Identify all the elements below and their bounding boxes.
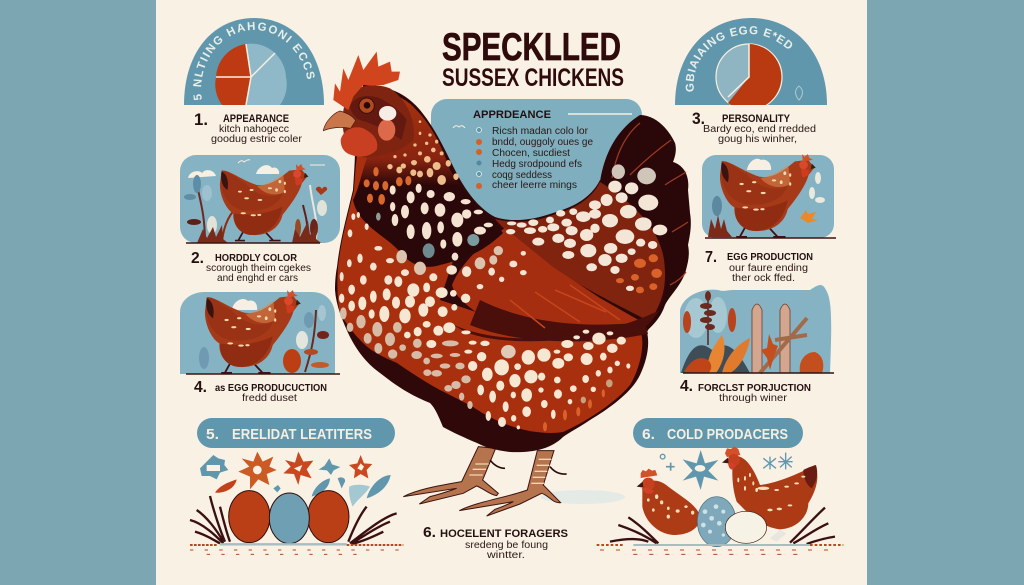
panel: hen scene 2: [180, 155, 340, 243]
hens and eggs right: [597, 446, 843, 554]
panel: centre appearance list: Ricsh madan colo lor: [492, 126, 589, 137]
beak: [323, 111, 356, 131]
text: 4 as egg production: as EGG PRODUCUCTION: [215, 382, 327, 394]
saddle: [495, 182, 665, 322]
text: 6 hocelent foragers: [423, 524, 568, 561]
text: 4 as egg production: 4.: [194, 379, 207, 396]
panel: centre appearance list: bndd, ouggoly oues ge: [492, 137, 593, 148]
text: 2 hordly color: 2.: [191, 250, 204, 267]
text: 7 egg production: our faure ending: [729, 263, 808, 274]
text: 6 hocelent foragers: 6.: [423, 524, 436, 541]
panel: centre appearance list: coqg seddess: [492, 170, 552, 181]
foot shadow: [541, 490, 625, 504]
head: [323, 52, 414, 158]
text: 4 forclst poruction: 4.: [680, 378, 693, 395]
title: SUSSEX CHICKENS: [442, 64, 624, 92]
wattle: [341, 127, 377, 157]
text: 6 hocelent foragers: sredeng be foung: [465, 540, 548, 551]
pill heading 5: [197, 418, 395, 448]
text: 4 forclst poruction: FORCLST PORJUCTION: [698, 382, 811, 394]
comb: [333, 52, 400, 110]
text: 3 personality: Bardy eco, end rredded: [703, 124, 816, 135]
hackle cape: [353, 105, 503, 267]
main chicken: [323, 52, 691, 516]
body: [335, 85, 666, 452]
text: 6 hocelent foragers: HOCELENT FORAGERS: [440, 528, 568, 540]
text: 7 egg production: [705, 249, 813, 284]
pill heading 5: ERELIDAT LEATITERS: [232, 426, 372, 443]
panel: centre appearance list: cheer leerre mings: [492, 180, 577, 191]
pill heading 5: 5.: [206, 426, 219, 443]
text: 7 egg production: ther ock ffed.: [732, 273, 795, 284]
text: 4 as egg production: [194, 379, 327, 404]
text: 1 appearance: goodug estric coler: [211, 134, 303, 145]
red plumage: [337, 90, 642, 433]
panel: gauge left: 5 NLTIING HAHGONI ECCS: [193, 22, 315, 100]
text: 6 hocelent foragers: wintter.: [486, 550, 525, 561]
panel: centre appearance list: Chocen, sucdiest: [492, 148, 570, 159]
panel: centre appearance list: APPRDEANCE: [473, 109, 551, 121]
pill heading 6: 6.: [642, 426, 655, 443]
text: 2 hordly color: HORDDLY COLOR: [215, 252, 297, 264]
text: 1 appearance: APPEARANCE: [223, 113, 289, 125]
panel: hen scene 4: [180, 290, 340, 374]
wing: [452, 228, 642, 332]
text: 2 hordly color: and enghd er cars: [217, 273, 298, 284]
feather spots: saddle: [506, 164, 667, 293]
pill heading 6: COLD PRODACERS: [667, 426, 788, 443]
text: 1 appearance: 1.: [194, 110, 208, 129]
text: 3 personality: [692, 109, 816, 145]
text: 1 appearance: [194, 110, 303, 145]
text: 3 personality: PERSONALITY: [722, 113, 791, 125]
panel: centre appearance list: [431, 99, 642, 224]
title: [442, 26, 624, 92]
text: 3 personality: 3.: [692, 109, 705, 128]
text: 2 hordly color: [191, 250, 311, 284]
text: 1 appearance: kitch nahogecc: [219, 124, 289, 135]
text: 4 forclst poruction: through winer: [719, 393, 788, 404]
text: 7 egg production: EGG PRODUCTION: [727, 251, 813, 263]
panel: hen scene 7: [702, 154, 836, 238]
pill heading 6: [633, 418, 803, 448]
wing under band: [448, 300, 660, 341]
text: 4 as egg production: fredd duset: [242, 393, 297, 404]
cream centre sheet: [156, 0, 867, 585]
eye: [359, 98, 374, 113]
feather spots: neck, cape and chest: [340, 120, 527, 295]
panel: forage scene: [680, 285, 834, 373]
text: 7 egg production: 7.: [705, 249, 717, 266]
text: 2 hordly color: scorough theim cgekes: [206, 263, 311, 274]
legs and feet: [403, 447, 567, 516]
panel: centre appearance list: Hedg srodpound efs: [492, 159, 582, 170]
ear: [378, 119, 395, 141]
icons and eggs left: [190, 452, 403, 554]
panel: gauge right: GBIAIAING EGG E*ED: [686, 26, 792, 92]
panel: gauge right: [675, 18, 827, 105]
text: 3 personality: goug his winher,: [718, 134, 797, 145]
text: 4 forclst poruction: [680, 378, 811, 404]
feather spots: lower body and thigh: [339, 279, 630, 431]
tail feathers: [560, 115, 691, 337]
title: SPECKLLED: [442, 26, 621, 69]
